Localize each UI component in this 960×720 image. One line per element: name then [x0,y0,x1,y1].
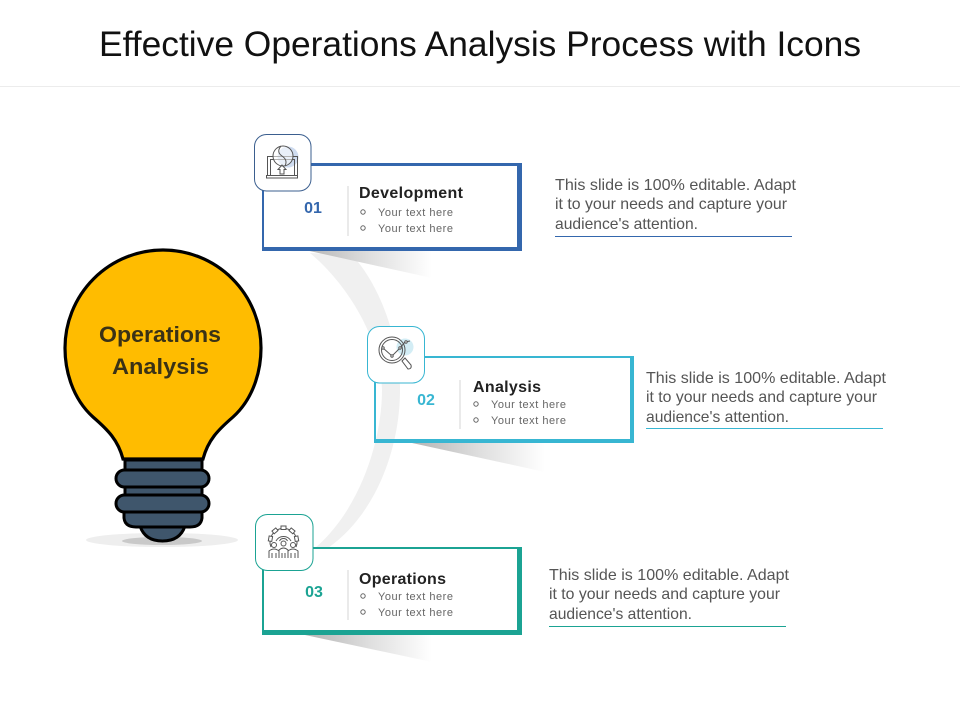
bulb glass [65,250,261,459]
number 03: 03 [305,584,323,601]
card shadow 1 [305,250,432,278]
icon: gear team [268,526,299,558]
bullets: Your text here [378,223,453,235]
description 3: audience's attention. [549,606,692,623]
bulb base [116,460,209,541]
description 1: audience's attention. [555,216,698,233]
icon tile [368,326,424,383]
heading: Development [359,185,464,202]
bullets: Your text here [378,607,453,619]
bullets: Your text here [491,415,566,427]
light bulb [65,250,261,547]
bullets: Your text here [378,207,453,219]
description 2: This slide is 100% editable. Adapt [646,370,887,387]
bullets [474,399,566,427]
description 3: This slide is 100% editable. Adapt [549,567,790,584]
icon: magnifier chart [379,337,414,369]
number 02: 02 [417,392,435,409]
icon tile [256,514,313,570]
bulb shadow [86,533,238,547]
description 1 [555,177,797,236]
description 3 [549,567,790,626]
description 2 [646,370,887,428]
bullets [361,591,453,619]
panel: development [254,134,522,251]
bulb label: Analysis [112,354,209,379]
bulb label: Operations [99,322,221,347]
bullets: Your text here [378,591,453,603]
description 1: This slide is 100% editable. Adapt [555,177,797,194]
heading: Operations [359,571,446,588]
description 2: it to your needs and capture your [646,389,878,406]
title: Effective Operations Analysis Process with Icons [99,25,861,64]
bullets [361,207,453,235]
heading: Analysis [473,379,541,396]
description 3: it to your needs and capture your [549,586,781,603]
icon tile [254,134,311,191]
card shadow 2 [412,443,545,472]
bulb label [99,322,221,379]
card shadow 3 [305,635,432,662]
bullets: Your text here [491,399,566,411]
number 01: 01 [304,200,322,217]
description 2: audience's attention. [646,409,789,426]
connecting arc [310,253,400,548]
panel: operations [256,514,522,635]
icon: laptop globe [266,146,298,178]
description 1: it to your needs and capture your [555,196,788,213]
panel: analysis [368,326,634,443]
